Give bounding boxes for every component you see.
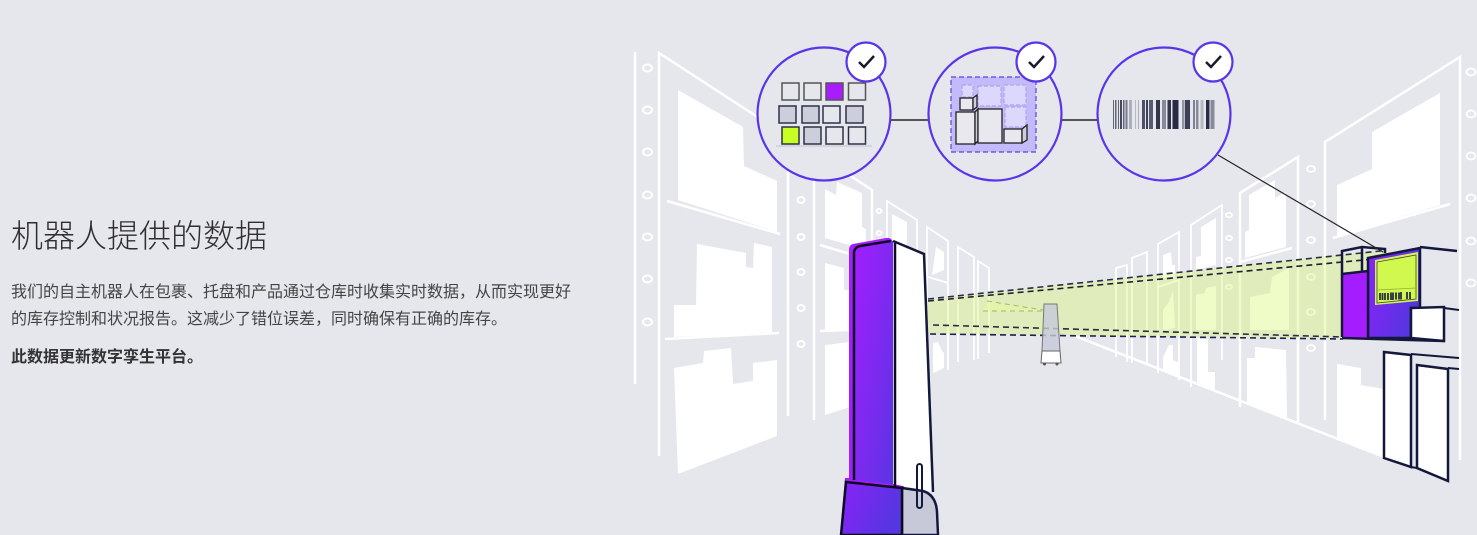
text block: description: 我们的自主机器人在包裹、托盘和产品通过仓库时收集实时数据，从而实现更好 bbox=[11, 284, 571, 301]
scan beam bbox=[927, 250, 1385, 339]
check badges bbox=[846, 42, 1232, 82]
scanned shelf: pallet with label bbox=[1342, 247, 1459, 481]
title: 机器人提供的数据 bbox=[11, 218, 267, 254]
circle: barcode bbox=[1098, 48, 1230, 180]
circle: inventory grid bbox=[758, 48, 890, 180]
connector lines bbox=[889, 120, 1383, 252]
circle: pallet volume bbox=[928, 48, 1062, 180]
text block: description: 的库存控制和状况报告。这减少了错位误差，同时确保有正确的库存。 bbox=[11, 311, 507, 328]
shipping label bbox=[1375, 252, 1418, 305]
text block: description bbox=[11, 283, 571, 328]
warehouse shelves: left aisle bbox=[635, 52, 989, 474]
text block: bold note: 此数据更新数字孪生平台。 bbox=[11, 349, 203, 366]
far robot bbox=[983, 301, 1061, 366]
foreground robot bbox=[840, 238, 938, 535]
warehouse shelves: right aisle bbox=[1075, 57, 1476, 460]
